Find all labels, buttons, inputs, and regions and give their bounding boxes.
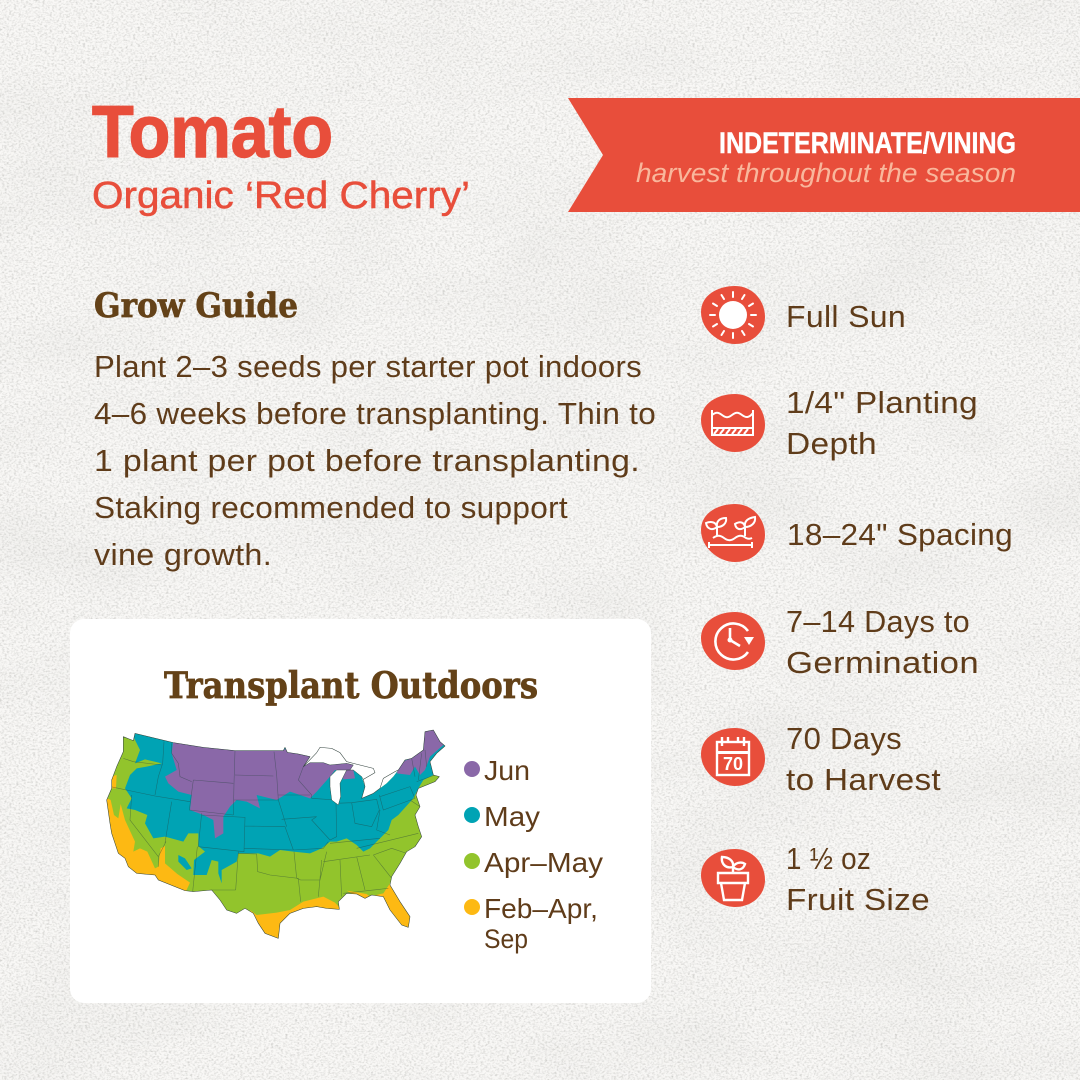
legend: planting months: Sep (484, 924, 528, 954)
banner: growth habit (568, 98, 1080, 212)
item: spacing: 18–24" Spacing (787, 517, 1013, 552)
legend: planting months: May (484, 801, 540, 832)
subtitle: Organic ‘Red Cherry’ (92, 175, 470, 217)
banner: growth habit: harvest throughout the season (636, 158, 1016, 188)
item: days to harvest: to Harvest (786, 762, 941, 797)
legend: planting months: Apr–May (484, 847, 603, 878)
item: planting depth: 1/4" Planting (786, 385, 978, 420)
panel: transplant outdoors (70, 619, 651, 1003)
legend: planting months (464, 755, 603, 954)
item: planting depth (701, 385, 978, 461)
item: germination (701, 604, 979, 680)
legend: planting months: Feb–Apr, (484, 893, 598, 924)
state borders (111, 742, 435, 902)
icon: seedlings spacing (701, 504, 765, 562)
icon: calendar: 70 (723, 754, 743, 774)
text block: grow guide instructions: 4–6 weeks before transplanting. Thin to (94, 396, 656, 431)
item: fruit size (701, 841, 930, 917)
icon: clock (701, 612, 765, 670)
infographic content (70, 98, 1080, 1003)
item: fruit size: Fruit Size (786, 882, 930, 917)
great lakes and coast outlines (107, 730, 445, 938)
item: days to harvest: 70 Days (786, 721, 902, 756)
text block: grow guide instructions: vine growth. (94, 537, 272, 572)
heading: Grow Guide: Grow Guide (94, 286, 298, 326)
item: days to harvest (701, 721, 941, 797)
item: full sun (701, 286, 906, 344)
text block: grow guide instructions: Plant 2–3 seeds per starter pot indoors (94, 349, 642, 384)
icon: potted plant (701, 849, 765, 907)
item: germination: 7–14 Days to (786, 604, 970, 639)
item: spacing (701, 504, 1013, 562)
zones (106, 730, 445, 938)
text block: grow guide instructions: 1 plant per pot before transplanting. (94, 443, 640, 478)
title: Tomato (92, 92, 333, 173)
legend: planting months: Jun (484, 755, 530, 786)
icon: soil depth (701, 394, 765, 452)
icon: calendar (701, 728, 765, 786)
icon: sun (701, 286, 765, 344)
heading: Transplant Outdoors: Transplant Outdoors (164, 665, 538, 707)
item: full sun: Full Sun (786, 299, 906, 334)
text block: grow guide instructions: Staking recommended to support (94, 490, 568, 525)
map: US planting zones (106, 730, 446, 939)
banner: growth habit: INDETERMINATE/VINING (719, 127, 1016, 160)
item: germination: Germination (786, 645, 979, 680)
text block: grow guide instructions (94, 349, 656, 572)
item: fruit size: 1 ½ oz (786, 841, 871, 876)
item: planting depth: Depth (786, 426, 877, 461)
